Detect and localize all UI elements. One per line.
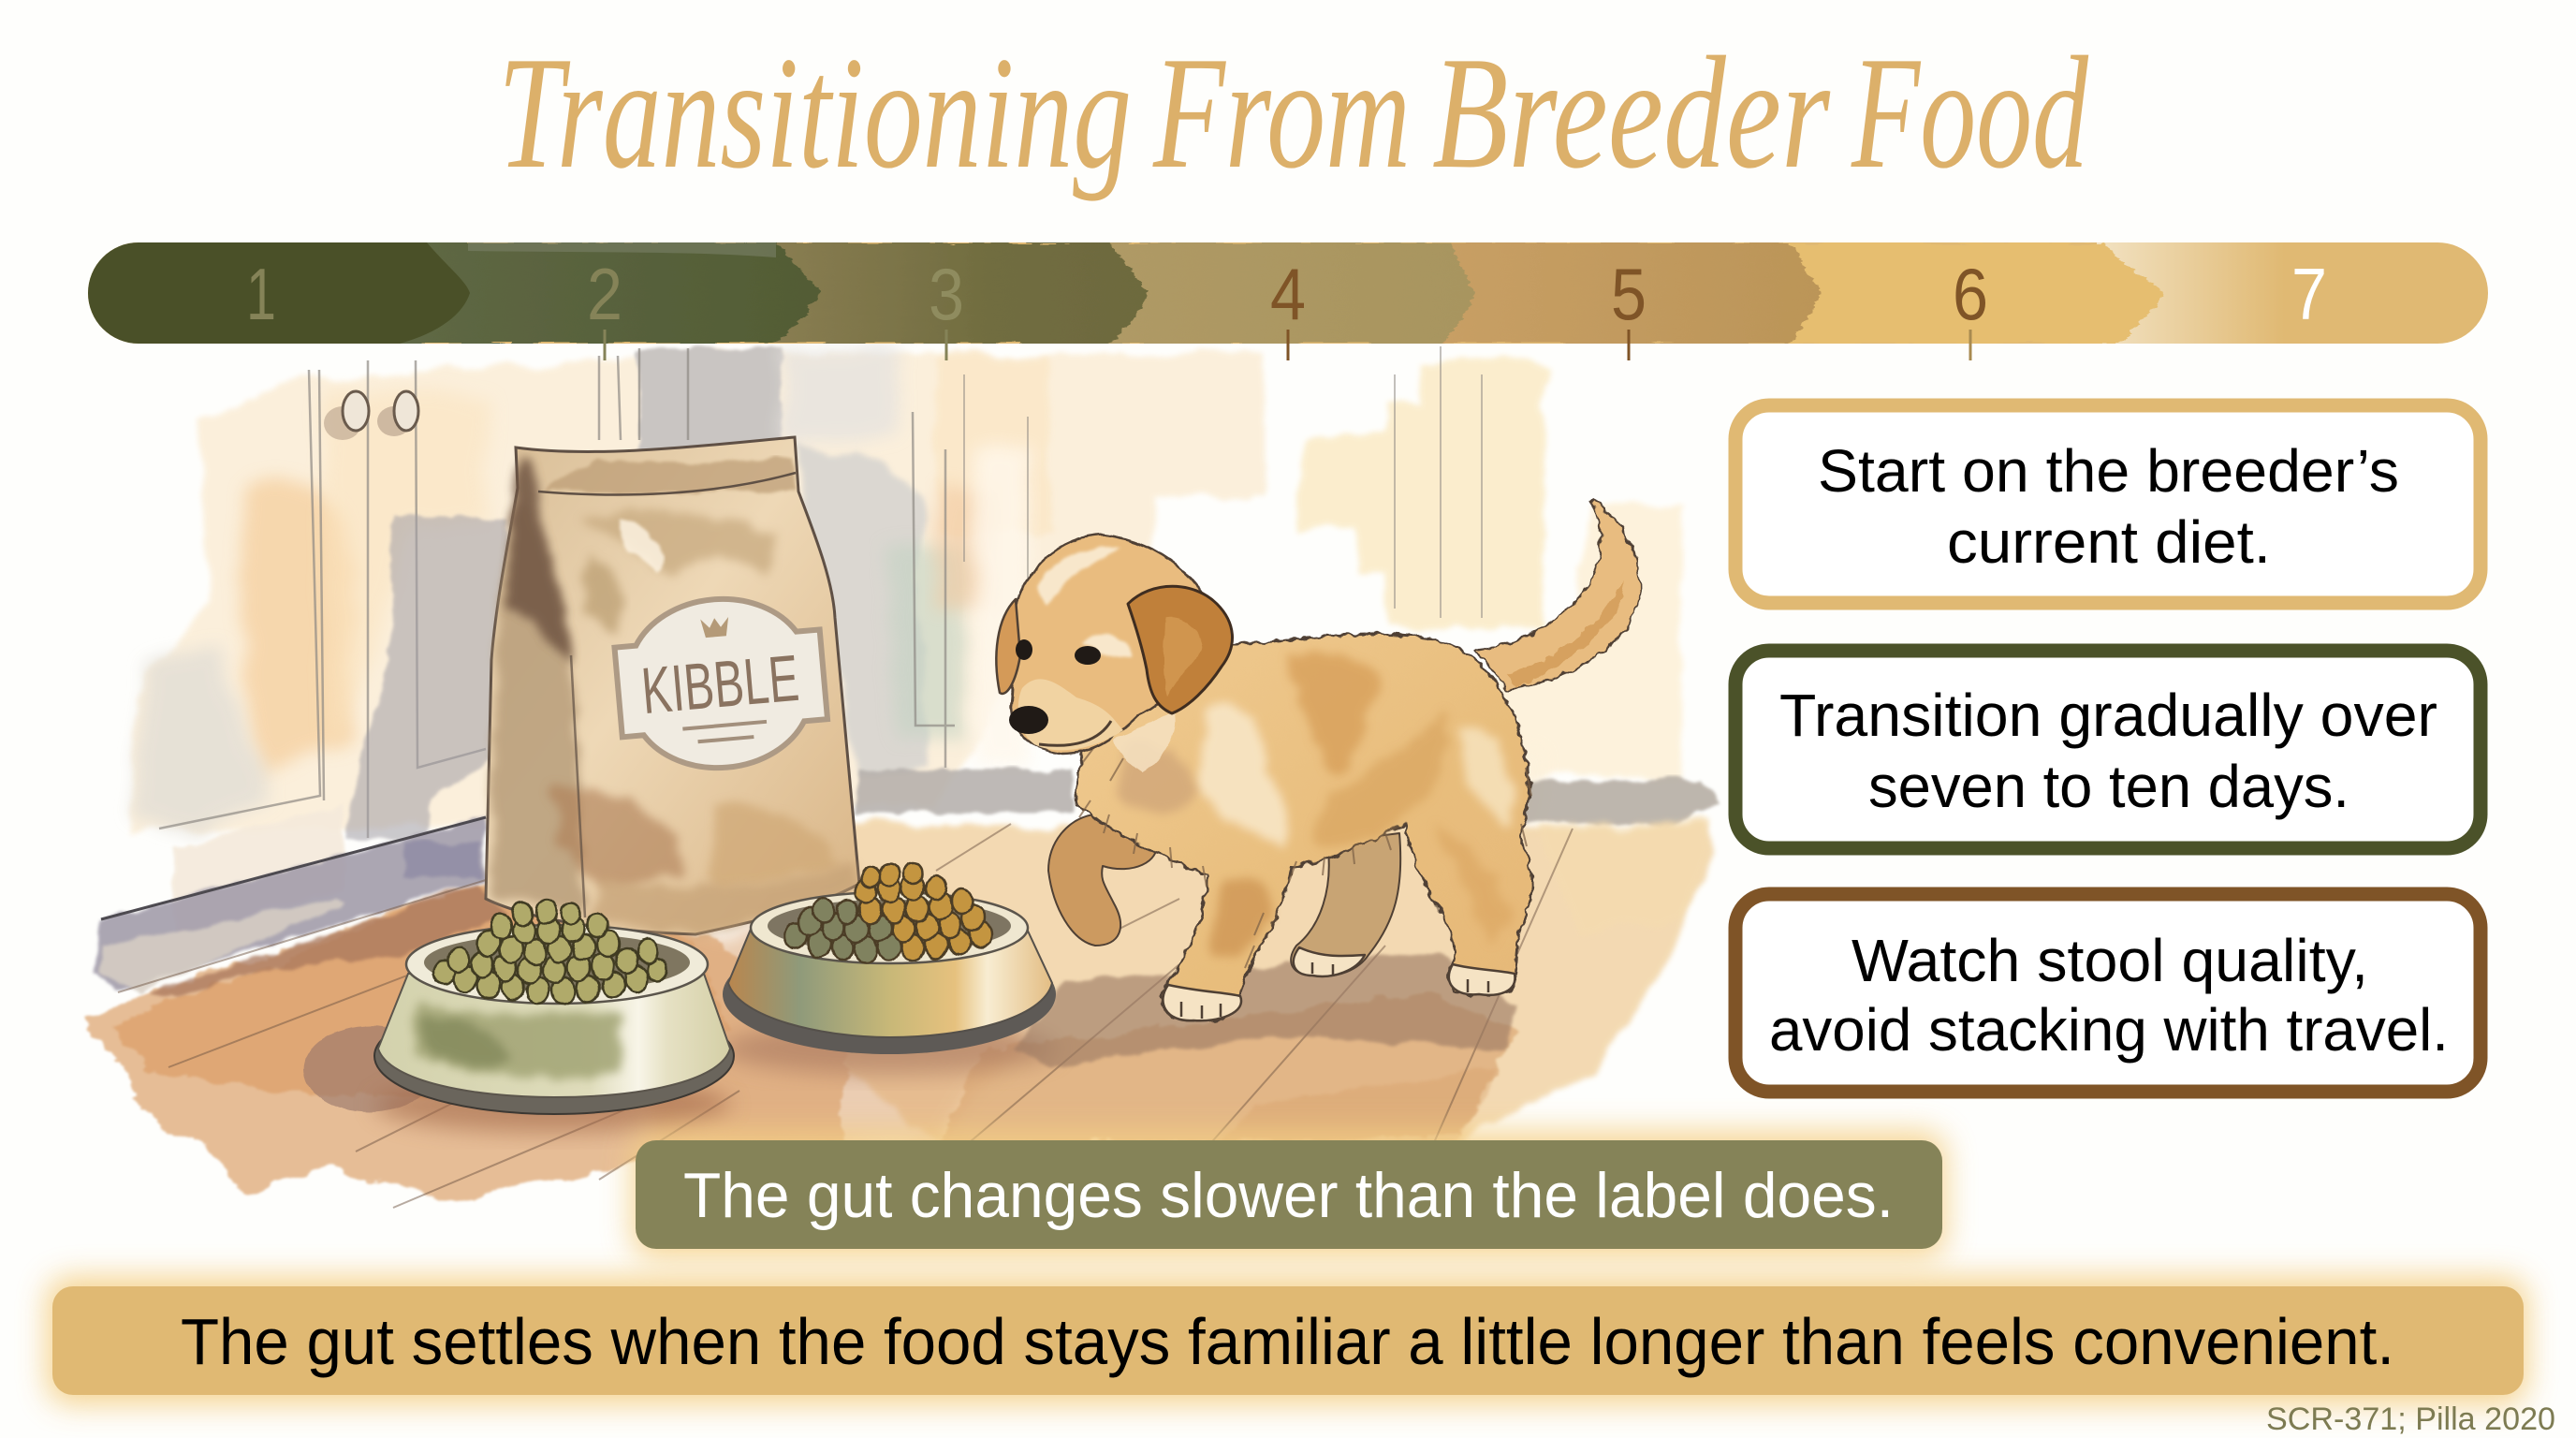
timeline bar: seven day chevrons (75, 242, 2488, 360)
card: transition gradually: Transition gradually over (1779, 682, 2437, 749)
card: start on current diet: Start on the breeder’s (1818, 437, 2399, 505)
title: Transitioning (498, 24, 1132, 202)
card: start on current diet: current diet. (1947, 508, 2271, 576)
day numbers (246, 253, 2327, 335)
kibble: green pile (433, 900, 667, 1004)
day 4 segment (1076, 242, 1474, 344)
forehead highlights (1039, 547, 1131, 657)
cabinet knobs (324, 391, 418, 440)
muzzle (1018, 679, 1123, 750)
title (498, 24, 2089, 202)
title: From (1152, 24, 1411, 202)
kibble label: KIBBLE (638, 641, 801, 727)
title: Food (1851, 24, 2089, 202)
kibble bag (486, 437, 859, 934)
card: watch stool quality: avoid stacking with travel. (1769, 996, 2449, 1064)
lifted front leg (1048, 805, 1157, 946)
eyes and nose (1009, 639, 1101, 734)
cabinet doors (159, 346, 1482, 838)
callout: gut changes slower: The gut changes slower than the label does. (683, 1160, 1894, 1231)
source note: SCR-371; Pilla 2020 (2266, 1401, 2555, 1437)
card: watch stool quality (1735, 894, 2481, 1092)
title: Breeder (1432, 24, 1831, 202)
day 6 segment (2097, 242, 2164, 344)
card: watch stool quality: Watch stool quality, (1852, 927, 2368, 994)
day 3 segment (749, 242, 1147, 344)
illustration: puppy, kibble bag and two bowls (80, 346, 1718, 1208)
head (1011, 535, 1217, 754)
day numbers: 7 (2291, 253, 2327, 335)
baseboards (94, 770, 1718, 992)
day numbers: 3 (929, 253, 964, 335)
day 1 segment (75, 242, 470, 344)
floorboard lines (118, 824, 1573, 1208)
puppy floor shadow (1013, 951, 1515, 1067)
fur strokes (1079, 740, 1531, 968)
card: transition gradually: seven to ten days. (1868, 753, 2349, 820)
door shadow (346, 518, 507, 838)
card: transition gradually (1735, 651, 2481, 848)
day numbers: 5 (1611, 253, 1647, 335)
body and near legs (1076, 634, 1531, 1020)
card: start on current diet (1735, 405, 2481, 603)
neck fur (1114, 712, 1176, 772)
day numbers: 1 (246, 253, 276, 335)
tail (1475, 501, 1640, 691)
day 5 segment (1404, 242, 1821, 344)
bowl shadow (304, 1022, 1058, 1133)
day ticks (605, 330, 1970, 360)
far hind leg (1291, 833, 1400, 976)
day numbers: 2 (587, 253, 622, 335)
day 7 segment (2097, 242, 2264, 344)
right ear (1128, 586, 1232, 713)
day numbers: 6 (1953, 253, 1988, 335)
day 2 segment (393, 242, 819, 344)
coat patches (1114, 652, 1513, 959)
day numbers: 4 (1270, 253, 1306, 335)
takeaway banner (47, 1277, 2527, 1404)
bowl 1: familiar food (374, 900, 734, 1114)
left ear (996, 599, 1020, 694)
bowl 2: mixed food (723, 863, 1056, 1054)
day 2 upper pale edge (468, 242, 776, 257)
puppy (996, 501, 1640, 1020)
kibble: mixed pile (784, 863, 992, 962)
floor (80, 824, 1711, 1201)
wall wash (131, 348, 1682, 838)
paws (1163, 947, 1515, 1020)
kibble label (611, 591, 831, 776)
callout: gut changes slower (632, 1131, 1946, 1258)
takeaway banner: The gut settles when the food stays familiar a little longer than feels convenient. (181, 1305, 2394, 1378)
